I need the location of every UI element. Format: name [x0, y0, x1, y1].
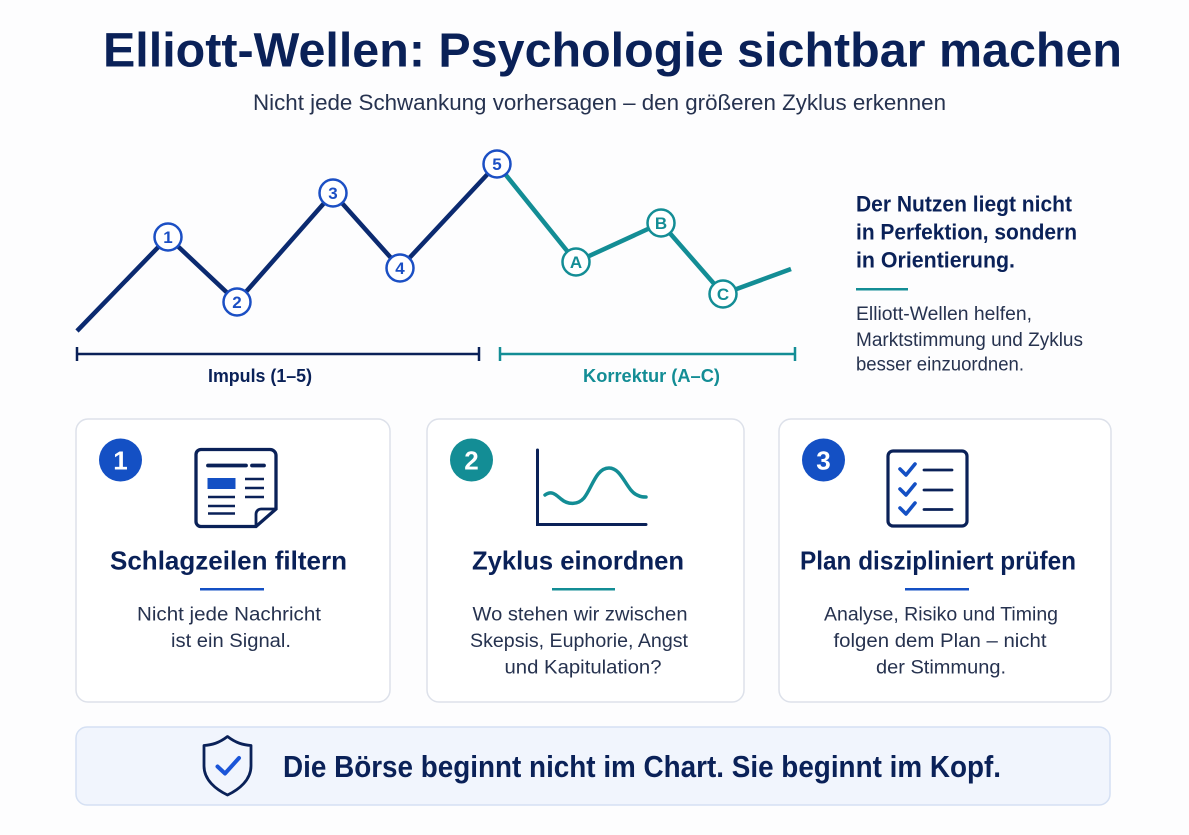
- side note heading: [856, 192, 1077, 272]
- node 3: 3: [328, 184, 338, 203]
- side note text: Elliott-Wellen helfen,: [856, 304, 1032, 325]
- card text: [137, 604, 322, 652]
- wave chart: [77, 150, 791, 331]
- icon: newspaper: [196, 450, 276, 526]
- card text: der Stimmung.: [876, 658, 1006, 678]
- node 5: 5: [492, 155, 502, 174]
- node A: A: [570, 253, 582, 272]
- node B: [648, 210, 674, 236]
- badge 1: [99, 438, 142, 482]
- card text: Analyse, Risiko und Timing: [824, 604, 1058, 626]
- icon: cycle chart: [538, 450, 646, 524]
- panel: Zyklus einordnen: [427, 419, 744, 702]
- subtitle: Nicht jede Schwankung vorhersagen – den größeren Zyklus erkennen: [253, 90, 946, 115]
- node 3: [320, 180, 346, 206]
- badge 2: 2: [464, 446, 479, 476]
- node C: [710, 280, 736, 308]
- card text: Wo stehen wir zwischen: [472, 604, 688, 626]
- node 4: [386, 254, 414, 282]
- node C: C: [717, 285, 729, 304]
- side note heading: in Perfektion, sondern: [856, 220, 1077, 244]
- impulse label: Impuls (1–5): [208, 366, 312, 386]
- card text: Nicht jede Nachricht: [137, 604, 322, 626]
- node 4: 4: [395, 259, 405, 278]
- node 1: [154, 224, 182, 250]
- card heading: Zyklus einordnen: [472, 546, 684, 576]
- panel: Plan diszipliniert prüfen: [779, 419, 1111, 702]
- node B: B: [655, 214, 667, 233]
- callout banner: [76, 727, 1110, 805]
- node 2: [224, 288, 250, 316]
- badge 3: 3: [816, 446, 831, 476]
- node 5: [484, 150, 510, 178]
- side note text: [856, 304, 1083, 376]
- correction line: [497, 164, 791, 294]
- card text: [824, 604, 1058, 678]
- icon: shield: [204, 736, 251, 795]
- card text: ist ein Signal.: [171, 631, 291, 652]
- node 2: 2: [232, 293, 242, 312]
- card heading: Plan diszipliniert prüfen: [800, 546, 1076, 576]
- node A: [562, 248, 590, 276]
- card text: und Kapitulation?: [504, 658, 662, 678]
- correction bracket: [500, 347, 795, 361]
- side note text: besser einzuordnen.: [856, 354, 1024, 376]
- card heading: Schlagzeilen filtern: [110, 546, 347, 576]
- side note heading: in Orientierung.: [856, 248, 1015, 272]
- node 1: 1: [163, 228, 173, 247]
- badge 1: 1: [113, 446, 128, 476]
- correction label: Korrektur (A–C): [583, 366, 720, 386]
- badge 2: [450, 438, 493, 482]
- impulse line: [77, 164, 497, 331]
- side note text: Marktstimmung und Zyklus: [856, 330, 1083, 351]
- panel: Schlagzeilen filtern: [76, 419, 390, 702]
- icon: checklist: [888, 451, 967, 526]
- card text: folgen dem Plan – nicht: [834, 631, 1047, 652]
- badge 3: [802, 438, 845, 482]
- callout text: Die Börse beginnt nicht im Chart. Sie beginnt im Kopf.: [283, 749, 1001, 784]
- card text: [470, 604, 689, 678]
- title: Elliott-Wellen: Psychologie sichtbar machen: [103, 24, 1122, 78]
- card text: Skepsis, Euphorie, Angst: [470, 631, 689, 652]
- side note: [856, 192, 1083, 376]
- impulse bracket: [77, 347, 479, 361]
- side note heading: Der Nutzen liegt nicht: [856, 192, 1073, 216]
